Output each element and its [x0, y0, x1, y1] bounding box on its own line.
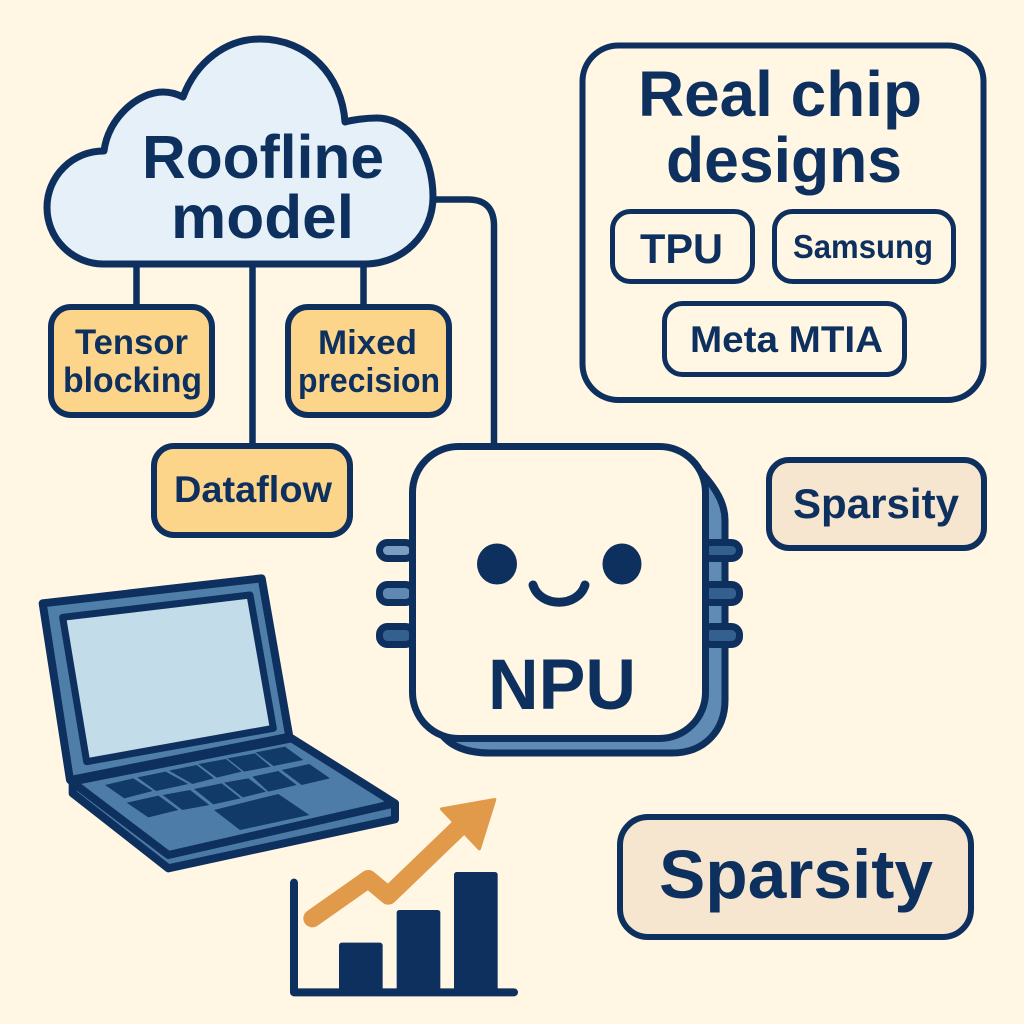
trackpad	[214, 794, 309, 830]
heading: Real chip designs: Real chip	[638, 58, 922, 130]
pins	[380, 542, 740, 644]
chip: Samsung	[774, 212, 954, 282]
laptop lid	[43, 578, 289, 780]
chip face	[412, 446, 706, 738]
heading: Roofline model: model	[171, 183, 354, 251]
icon: laptop	[43, 578, 395, 868]
box: Mixed precision: Mixed	[318, 324, 417, 362]
label: NPU: NPU	[488, 646, 636, 725]
box: Tensor blocking	[51, 307, 212, 415]
box: Sparsity small: Sparsity	[793, 480, 960, 527]
laptop deck	[72, 738, 395, 855]
chip: Meta MTIA: Meta MTIA	[690, 319, 883, 360]
box: Dataflow	[154, 446, 350, 535]
laptop base edge	[73, 784, 395, 868]
chip: Meta MTIA	[664, 304, 904, 374]
box: Dataflow: Dataflow	[174, 469, 332, 510]
box: Sparsity small	[769, 460, 984, 548]
box: Sparsity large	[620, 817, 971, 937]
heading: Roofline model	[142, 123, 384, 251]
heading: Roofline model: Roofline	[142, 123, 384, 191]
box: Tensor blocking: blocking	[63, 361, 202, 400]
trend arrow	[312, 800, 495, 918]
panel: Real chip designs	[582, 46, 984, 400]
keyboard keys	[105, 747, 330, 817]
heading: Real chip designs: designs	[666, 124, 902, 196]
chip: TPU	[612, 212, 752, 282]
chip: TPU: TPU	[640, 225, 723, 272]
chart axes	[294, 883, 514, 992]
chart: rising bars with arrow	[294, 800, 514, 993]
icon: NPU chip	[380, 446, 740, 753]
heading: Real chip designs	[638, 58, 922, 196]
box: Sparsity large: Sparsity	[659, 836, 933, 913]
box: Tensor blocking: Tensor	[75, 323, 188, 362]
chip back plate	[440, 462, 725, 753]
chip: Samsung: Samsung	[793, 228, 933, 265]
cloud: Roofline model	[47, 39, 433, 264]
box: Mixed precision	[288, 307, 449, 415]
box: Mixed precision: precision	[298, 362, 440, 400]
bars	[339, 872, 498, 993]
face: eyes and smile	[477, 544, 642, 602]
laptop screen	[63, 595, 273, 762]
connectors from cloud	[136, 200, 494, 448]
